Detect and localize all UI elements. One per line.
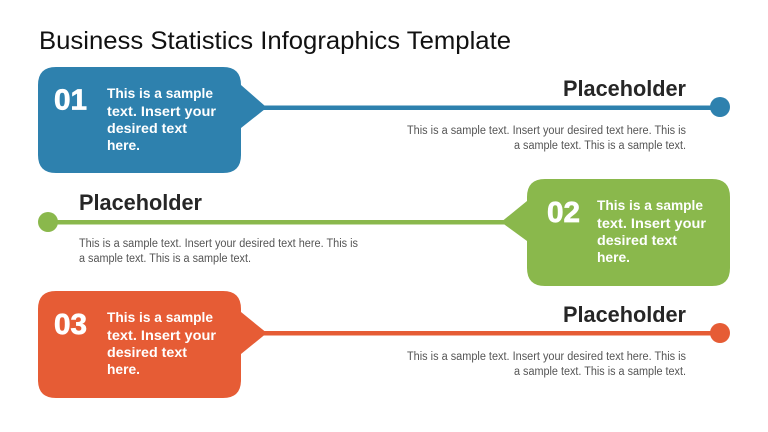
number 02: 02 <box>547 197 580 229</box>
callout text 03: here. <box>107 361 140 377</box>
panel: item 01 <box>38 67 730 173</box>
description 02: This is a sample text. Insert your desired text here. This is <box>79 238 358 250</box>
heading 01: Placeholder <box>563 76 686 101</box>
heading 03: Placeholder <box>563 302 686 327</box>
description 02: a sample text. This is a sample text. <box>79 253 251 265</box>
description 01: a sample text. This is a sample text. <box>514 140 686 152</box>
number 01: 01 <box>54 84 87 116</box>
number 03: 03 <box>54 309 87 341</box>
connector line 01 <box>258 106 720 110</box>
callout text 01: desired text <box>107 120 187 136</box>
panel: item 02 <box>38 179 730 286</box>
callout text 02: here. <box>597 249 630 265</box>
callout text 03: text. Insert your <box>107 327 217 343</box>
callout text 01: This is a sample <box>107 85 213 101</box>
node dot 01 <box>710 97 730 117</box>
callout text 02: text. Insert your <box>597 215 707 231</box>
callout box 02 <box>503 179 730 286</box>
callout text 03: desired text <box>107 344 187 360</box>
callout text 03: This is a sample <box>107 309 213 325</box>
description 03: a sample text. This is a sample text. <box>514 366 686 378</box>
callout text 02: This is a sample <box>597 197 703 213</box>
node dot 02 <box>38 212 58 232</box>
callout box 03 <box>38 291 265 398</box>
description 01: This is a sample text. Insert your desired text here. This is <box>407 125 686 137</box>
node dot 03 <box>710 323 730 343</box>
callout box 01 <box>38 67 265 173</box>
panel: item 03 <box>38 291 730 398</box>
callout text 01: here. <box>107 137 140 153</box>
title: Business Statistics Infographics Template <box>39 27 511 55</box>
callout text 01: text. Insert your <box>107 103 217 119</box>
callout text 02: desired text <box>597 232 677 248</box>
connector line 03 <box>258 331 720 336</box>
connector line 02 <box>48 220 510 224</box>
heading 02: Placeholder <box>79 190 202 215</box>
description 03: This is a sample text. Insert your desired text here. This is <box>407 351 686 363</box>
